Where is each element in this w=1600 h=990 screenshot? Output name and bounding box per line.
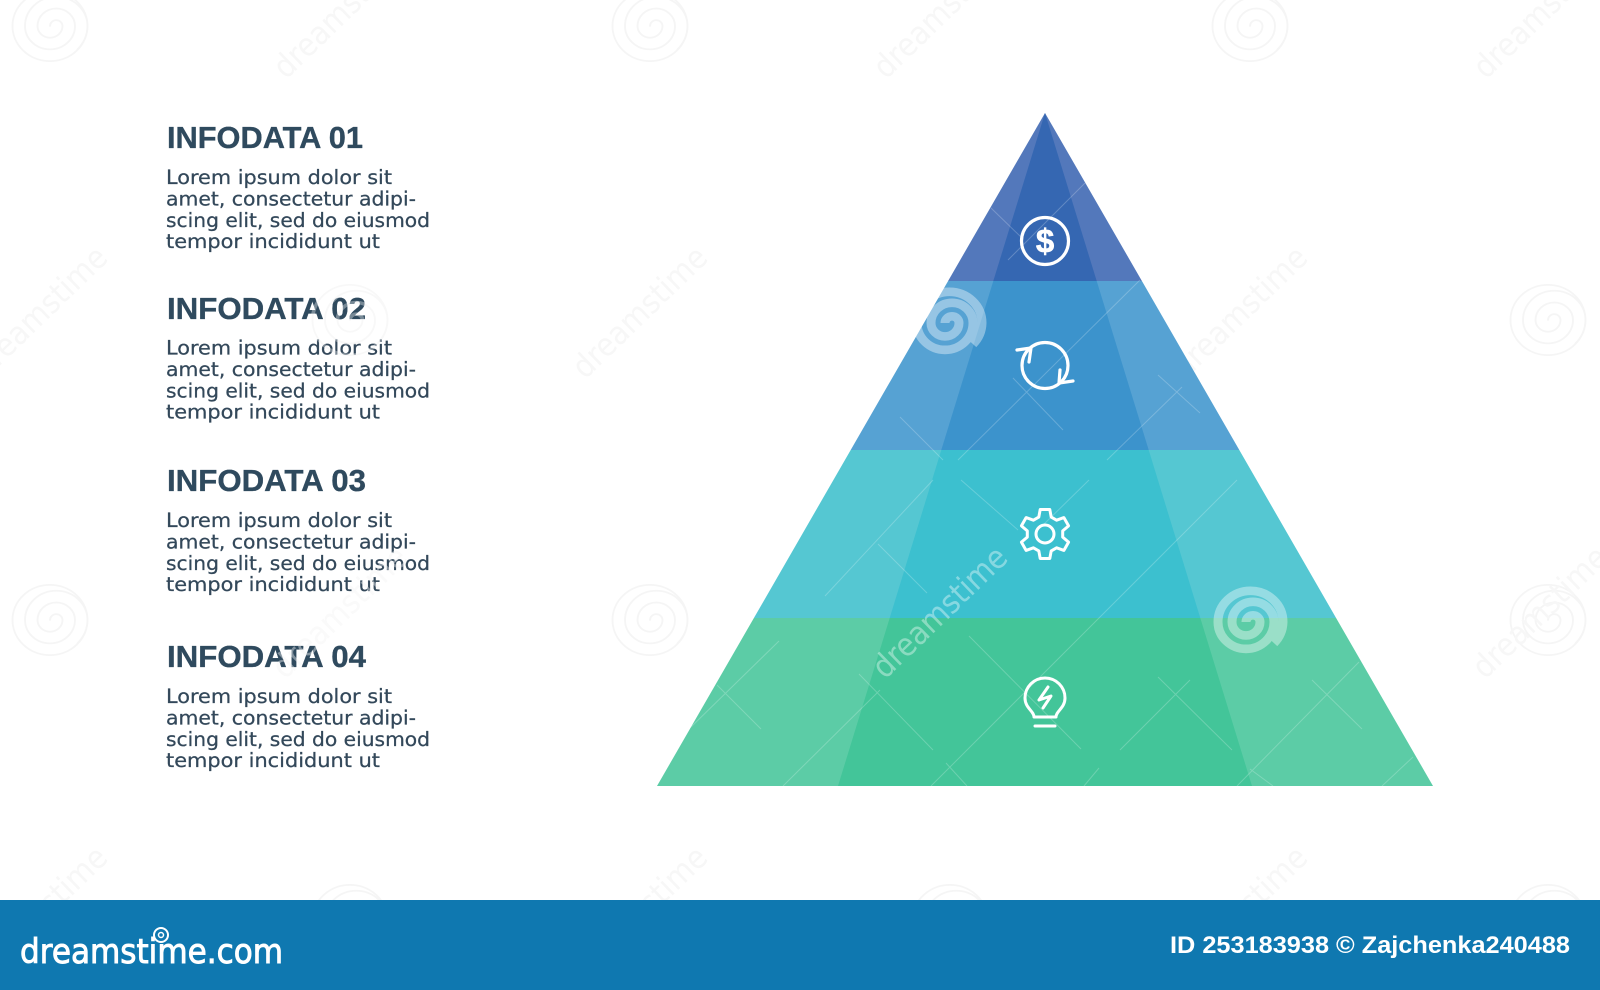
text block: infodata 02: amet, consectetur adipi- <box>166 358 416 381</box>
pyramid level 1: dark blue <box>948 113 1142 281</box>
text block: infodata 01 <box>166 120 430 253</box>
pyramid level 2: blue <box>851 281 1239 450</box>
text block: infodata 04: scing elit, sed do eiusmod <box>166 728 430 751</box>
text block: infodata 04 <box>166 639 430 772</box>
text block: infodata 03: scing elit, sed do eiusmod <box>166 552 430 575</box>
watermark: faint spirals and diagonal text on white: dreamstime <box>1164 238 1315 386</box>
watermark: dreamstime text on pyramid: dreamstime <box>864 538 1015 686</box>
footer logo: dreamstime.com: dreamstime.com <box>20 932 283 972</box>
footer image id and credit: ID 253183938 © Zajchenka240488 <box>1170 932 1570 959</box>
icon: dollar coin: $ <box>1036 222 1054 260</box>
text block: infodata 03: amet, consectetur adipi- <box>166 530 416 554</box>
text block: infodata 01: INFODATA 01 <box>167 120 363 155</box>
text block: infodata 01: amet, consectetur adipi- <box>166 188 416 210</box>
text block: infodata 03: INFODATA 03 <box>167 463 366 498</box>
watermark: faint spirals and diagonal text on white: dreamstime <box>1164 838 1315 986</box>
text block: infodata 02: scing elit, sed do eiusmod <box>166 380 430 402</box>
text block: infodata 04: amet, consectetur adipi- <box>166 706 416 730</box>
text block: infodata 02: Lorem ipsum dolor sit <box>166 336 392 360</box>
text block: infodata 01: Lorem ipsum dolor sit <box>166 166 392 189</box>
pyramid <box>657 113 1433 786</box>
text block: infodata 04: tempor incididunt ut <box>166 749 380 772</box>
footer band <box>0 900 1600 990</box>
watermark: faint spirals and diagonal text on white: dreamstime <box>564 238 715 386</box>
icon: gear <box>1021 510 1069 558</box>
text block: infodata 04: INFODATA 04 <box>167 639 367 674</box>
text block: infodata 04: Lorem ipsum dolor sit <box>166 685 392 708</box>
text block: infodata 02: tempor incididunt ut <box>166 400 380 424</box>
text block: infodata 02: INFODATA 02 <box>167 291 366 326</box>
icon: light bulb with bolt <box>1025 678 1065 726</box>
pyramid level 3: teal <box>754 450 1336 618</box>
pyramid level 4: green <box>657 618 1433 786</box>
watermark over left text <box>264 285 415 686</box>
icon: refresh arrows <box>1017 342 1073 388</box>
watermark: faint spirals and diagonal text on white: dreamstime <box>564 838 715 986</box>
text block: infodata 03: tempor incididunt ut <box>166 573 380 596</box>
text block: infodata 01: scing elit, sed do eiusmod <box>166 209 430 232</box>
watermark: strong spirals on pyramid <box>917 292 1283 649</box>
text block: infodata 03 <box>166 463 430 596</box>
text block: infodata 03: Lorem ipsum dolor sit <box>166 509 392 532</box>
watermark over pyramid: thin lines <box>691 183 1413 786</box>
text block list <box>166 120 430 772</box>
watermark: faint spirals and diagonal text on white: dreamstime <box>264 538 415 686</box>
icon: dollar coin <box>1022 218 1068 264</box>
text block: infodata 02 <box>166 291 430 424</box>
watermark over left text: dreamstime <box>264 538 415 686</box>
text block: infodata 01: tempor incididunt ut <box>166 230 380 253</box>
